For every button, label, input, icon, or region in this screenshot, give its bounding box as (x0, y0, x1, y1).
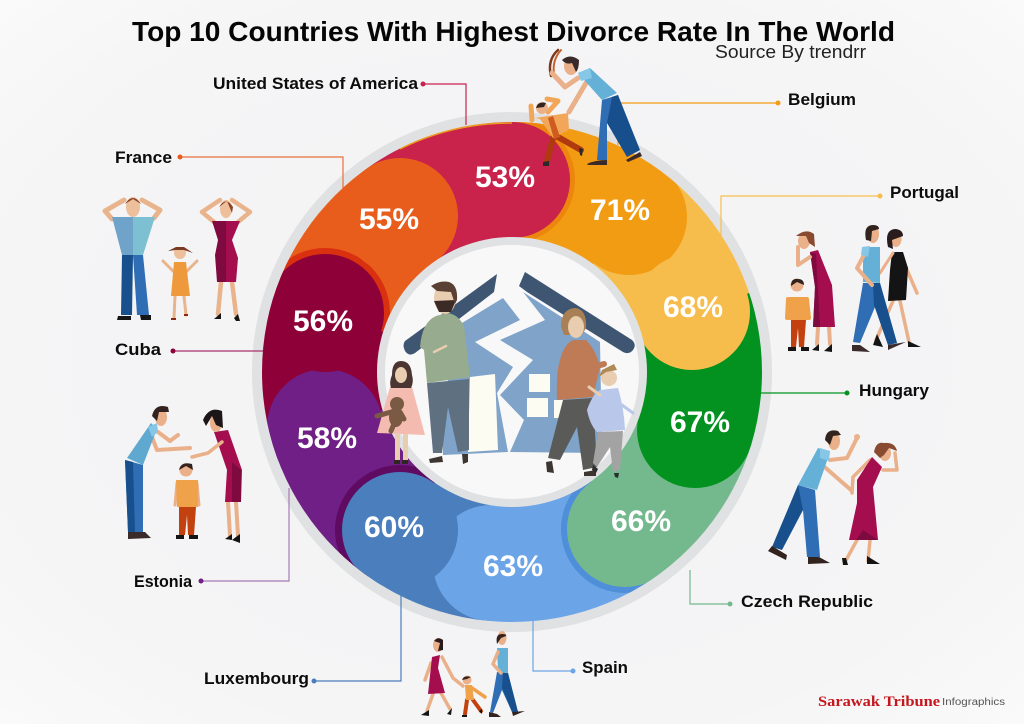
people: Portugal woman with child and leaving man (787, 225, 921, 352)
people: bottom family walking (421, 631, 525, 717)
label: Cuba: Cuba (115, 340, 162, 359)
label: Hungary: Hungary (859, 381, 930, 400)
percentage values: 66% (611, 505, 671, 538)
source line: Source By trendrr (715, 42, 866, 62)
people: Czech Republic man pushing woman (768, 430, 897, 565)
child (547, 137, 581, 161)
label: Hungary (758, 381, 930, 400)
mother (546, 308, 604, 476)
label: Estonia (134, 488, 289, 591)
label: United States of America: United States of America (213, 74, 419, 93)
label: Luxembourg: Luxembourg (204, 669, 309, 688)
label: United States of America (213, 74, 466, 125)
centre circle (377, 237, 647, 507)
boy (587, 364, 633, 478)
percentage values: 68% (663, 291, 723, 324)
label: France (115, 148, 343, 190)
label: Cuba (115, 340, 264, 359)
percentage values: 53% (475, 161, 535, 194)
percentage values: 56% (293, 305, 353, 338)
percentage values: 60% (364, 511, 424, 544)
percentage values: 67% (670, 406, 730, 439)
publisher logo: Sarawak Tribune (818, 694, 940, 710)
percentage values: 63% (483, 550, 543, 583)
label: Portugal (721, 183, 959, 240)
outer grey ring (252, 112, 772, 632)
centre illustration: broken house and family (377, 272, 635, 478)
label: Czech Republic (690, 570, 873, 611)
label: Czech Republic: Czech Republic (741, 592, 873, 611)
people: France family holding heads (105, 197, 250, 321)
label: Belgium: Belgium (788, 90, 856, 109)
label: Portugal: Portugal (890, 183, 959, 202)
label: Luxembourg (204, 595, 401, 688)
label: Spain: Spain (582, 658, 628, 677)
percentage values: 58% (297, 422, 357, 455)
father (420, 282, 470, 464)
people: Belgium man hitting child (531, 50, 642, 166)
label: Estonia: Estonia (134, 572, 193, 591)
percentage values (293, 161, 730, 583)
label: France: France (115, 148, 172, 167)
leaving couple (876, 263, 917, 342)
percentage values: 55% (359, 203, 419, 236)
title: Top 10 Countries With Highest Divorce Rate In The World (132, 16, 895, 47)
percentage values: 71% (590, 194, 650, 227)
publisher logo: Infographics (942, 697, 1005, 708)
publisher logo (818, 694, 1005, 710)
label: Belgium (618, 90, 856, 145)
label: Spain (533, 618, 628, 677)
broken house (404, 272, 635, 455)
ring chart of ten overlapping segments (262, 122, 762, 622)
people: Estonia couple arguing over child (125, 406, 242, 543)
girl with teddy bear (377, 361, 425, 464)
